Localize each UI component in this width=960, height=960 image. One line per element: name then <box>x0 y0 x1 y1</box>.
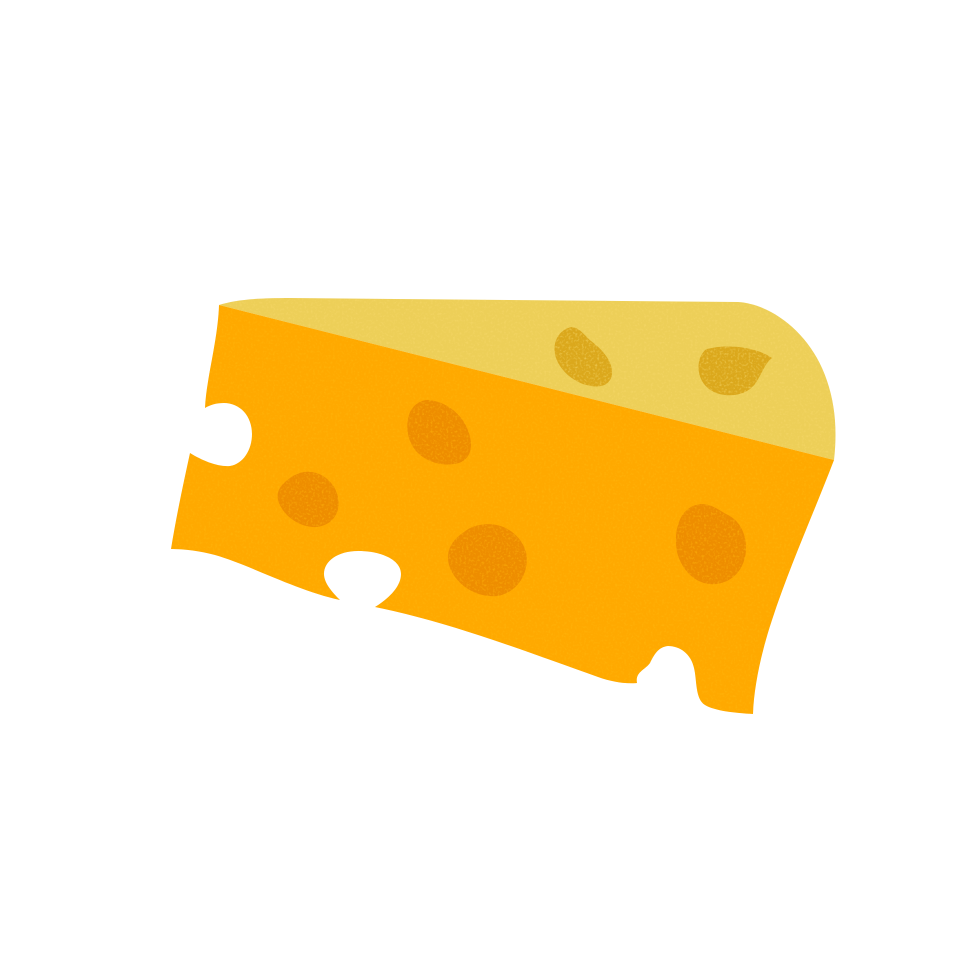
front hole centre <box>448 524 527 596</box>
top face hole right <box>698 346 772 395</box>
front hole right <box>676 504 746 584</box>
front hole top <box>407 400 471 464</box>
top face hole left <box>554 327 612 386</box>
cheese front face <box>171 305 834 714</box>
cheese top face <box>219 298 836 460</box>
front hole left <box>278 472 339 527</box>
